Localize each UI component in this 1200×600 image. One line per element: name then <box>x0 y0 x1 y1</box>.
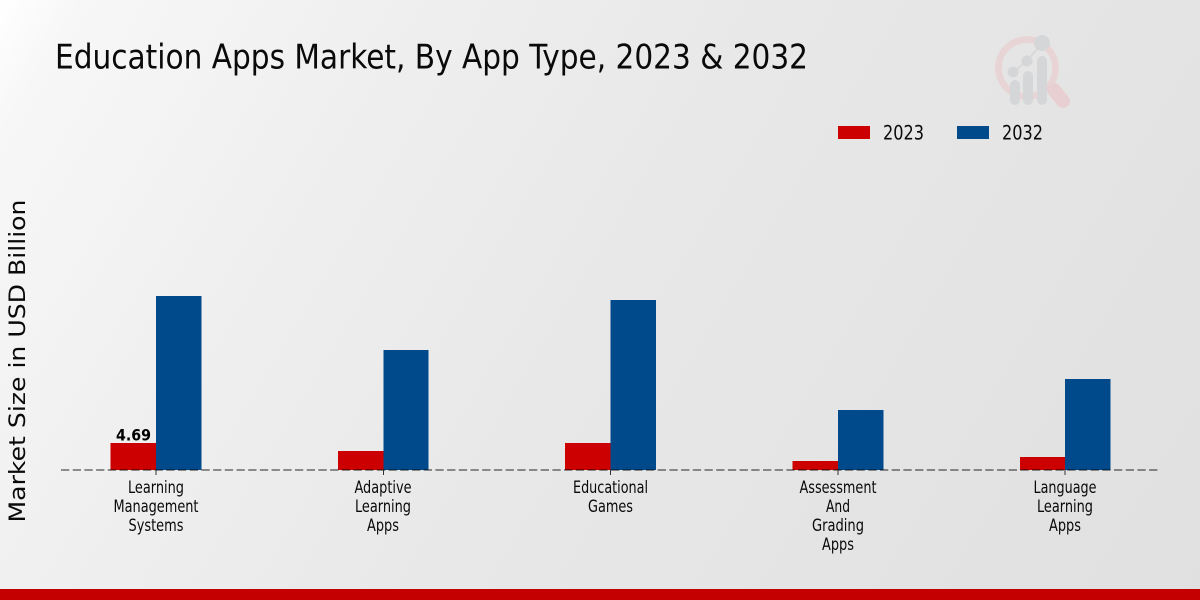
category label: Language Learning Apps <box>1034 478 1096 535</box>
category label: Assessment And Grading Apps: Assessment <box>800 478 877 497</box>
bars <box>110 296 1110 470</box>
category label: Assessment And Grading Apps: And <box>826 497 850 516</box>
legend item: 2023: 2023 <box>883 122 924 144</box>
category label: Language Learning Apps: Learning <box>1037 497 1093 516</box>
category label: Learning Management Systems: Management <box>114 497 199 516</box>
category label: Assessment And Grading Apps: Grading <box>812 516 864 535</box>
legend item: 2023 <box>838 122 924 144</box>
footer bar <box>0 589 1200 600</box>
category label: Educational Games <box>573 478 648 516</box>
category label: Learning Management Systems <box>114 478 199 535</box>
category label: Language Learning Apps: Apps <box>1049 516 1081 535</box>
category label: Learning Management Systems: Systems <box>128 516 184 535</box>
category label: Educational Games: Educational <box>573 478 648 497</box>
title: Education Apps Market, By App Type, 2023 & 2032 <box>55 38 808 78</box>
legend item: 2032: 2032 <box>1002 122 1043 144</box>
bar chart <box>61 296 1160 475</box>
legend <box>838 122 1043 144</box>
category label: Adaptive Learning Apps: Learning <box>355 497 411 516</box>
category label: Adaptive Learning Apps: Adaptive <box>354 478 412 497</box>
category label: Adaptive Learning Apps: Apps <box>367 516 399 535</box>
icon: watermark logo magnifier with bars <box>998 35 1063 105</box>
category label: Learning Management Systems: Learning <box>128 478 184 497</box>
category label: Language Learning Apps: Language <box>1034 478 1096 497</box>
y axis label: Market Size in USD Billion <box>5 200 31 522</box>
category label: Assessment And Grading Apps <box>800 478 877 554</box>
category label: Assessment And Grading Apps: Apps <box>822 535 854 554</box>
category label: Educational Games: Games <box>588 497 633 516</box>
x axis baseline <box>61 469 1160 471</box>
category label: Adaptive Learning Apps <box>354 478 412 535</box>
data label: 4.69: 4.69 <box>116 426 151 444</box>
legend item: 2032 <box>957 122 1043 144</box>
